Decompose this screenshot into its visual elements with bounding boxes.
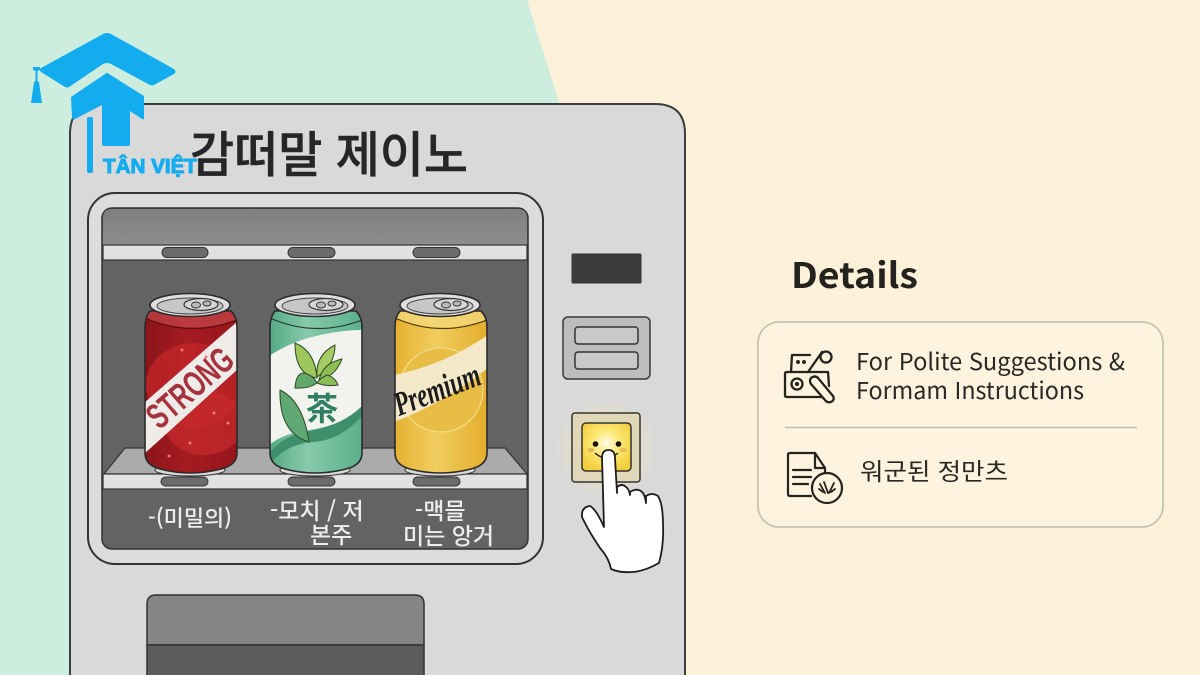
text: polite suggestions: Formam Instructions [856,372,1084,406]
can label: STRONG: STRONG [138,339,242,436]
background: mint panel [0,0,560,675]
machine body [70,104,685,675]
upper shelf [103,245,527,260]
display window [88,193,543,564]
icon: tea leaves [280,343,342,442]
shelf label: red can: -(미밀의) [148,501,232,533]
can label: Premium: Premium [388,357,486,424]
smiley face [588,441,626,458]
machine title: 감떠말 제이노 [190,116,468,187]
logo tassel [31,67,42,103]
dispense slot [147,595,424,675]
window frame [88,193,543,564]
can: strong [144,292,238,476]
glowing button [556,398,656,498]
panel: details card [758,322,1163,527]
shelf label: tea can: -모치 / 저 [270,492,364,526]
icon: tools [785,352,834,402]
shelf label: premium can: 미는 앙거 [403,517,494,551]
can: tea [269,293,363,483]
logo arrow [71,73,144,146]
text: korean detail: 워군된 정만츠 [860,452,1008,487]
icon: pointing hand [582,450,663,572]
logo: Tan Viet [31,33,197,178]
tea character: 茶 [306,384,338,430]
logo bar [87,117,93,173]
shelf label: premium can: -맥믈 [415,492,466,526]
can: premium [388,293,488,483]
logo wordmark: TÂN VIỆT [103,154,197,178]
coin slot panel [563,317,650,379]
shelf label: tea can: 본주 [310,516,352,550]
heading: Details: Details [791,248,918,299]
panel display [572,254,641,283]
lower shelf [103,448,527,489]
logo cap [40,33,176,88]
top shade [103,209,527,245]
vending machine [70,104,685,675]
window interior [102,208,528,549]
icon: document with badge [788,453,842,503]
text: polite suggestions: For Polite Suggestions & [856,343,1125,377]
